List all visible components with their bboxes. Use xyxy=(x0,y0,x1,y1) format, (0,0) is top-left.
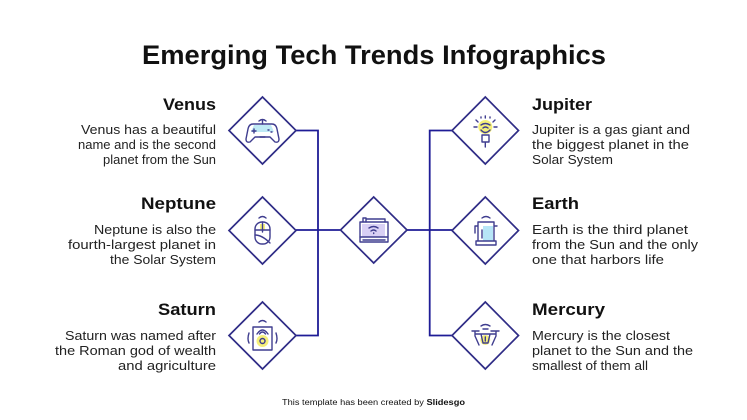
panel: Venus xyxy=(78,95,296,167)
panel: Earth xyxy=(452,194,699,267)
text block: Mercury description: planet to the Sun and the xyxy=(532,344,693,358)
text block: Neptune description xyxy=(68,223,216,267)
text block: Venus description: Venus has a beautiful xyxy=(81,123,216,137)
footer credit: This template has been created by Slidesgo xyxy=(282,398,465,407)
text block: Neptune description: the Solar System xyxy=(110,253,216,267)
icon: drone xyxy=(452,302,518,369)
text block: Neptune description: Neptune is also the xyxy=(94,223,216,237)
text block: Mercury description: smallest of them all xyxy=(532,359,648,373)
text block: Jupiter description: Jupiter is a gas giant and xyxy=(532,123,690,137)
panel: central router xyxy=(340,197,407,263)
heading: Venus: Venus xyxy=(163,95,216,114)
text block: Earth description xyxy=(532,223,699,267)
text block: Venus description: planet from the Sun xyxy=(103,153,216,167)
text block: Mercury description: Mercury is the closest xyxy=(532,329,671,343)
heading: Saturn: Saturn xyxy=(158,300,216,319)
text block: Earth description: from the Sun and the only xyxy=(532,238,699,252)
heading: Earth: Earth xyxy=(532,194,579,213)
text block: Mercury description xyxy=(532,329,693,373)
panel: Saturn xyxy=(55,300,296,373)
connector lines xyxy=(296,130,452,336)
text block: Earth description: Earth is the third planet xyxy=(532,223,689,237)
icon: game controller xyxy=(229,97,296,164)
text block: Venus description: name and is the second xyxy=(78,138,216,152)
panel: Neptune xyxy=(68,194,296,267)
heading: Mercury: Mercury xyxy=(532,300,606,319)
text block: Earth description: one that harbors life xyxy=(532,253,664,267)
panel: Mercury xyxy=(452,300,693,373)
text block: Jupiter description xyxy=(532,123,690,167)
text block: Venus description xyxy=(78,123,216,167)
title: Emerging Tech Trends Infographics xyxy=(142,40,606,70)
text block: Saturn description: and agriculture xyxy=(118,359,216,373)
heading: Jupiter: Jupiter xyxy=(532,95,592,114)
text block: Saturn description xyxy=(55,329,216,373)
panel: Jupiter xyxy=(452,95,690,167)
icon: computer mouse xyxy=(229,197,296,264)
icon: smart kettle xyxy=(452,197,518,264)
text block: Jupiter description: Solar System xyxy=(532,153,613,167)
icon: smart light bulb xyxy=(452,97,518,164)
text block: Neptune description: fourth-largest planet in xyxy=(68,238,216,252)
heading: Neptune: Neptune xyxy=(141,194,216,213)
text block: Saturn description: the Roman god of wealth xyxy=(55,344,216,358)
icon: smart speaker xyxy=(229,302,296,369)
text block: Jupiter description: the biggest planet in the xyxy=(532,138,689,152)
text block: Saturn description: Saturn was named after xyxy=(65,329,216,343)
